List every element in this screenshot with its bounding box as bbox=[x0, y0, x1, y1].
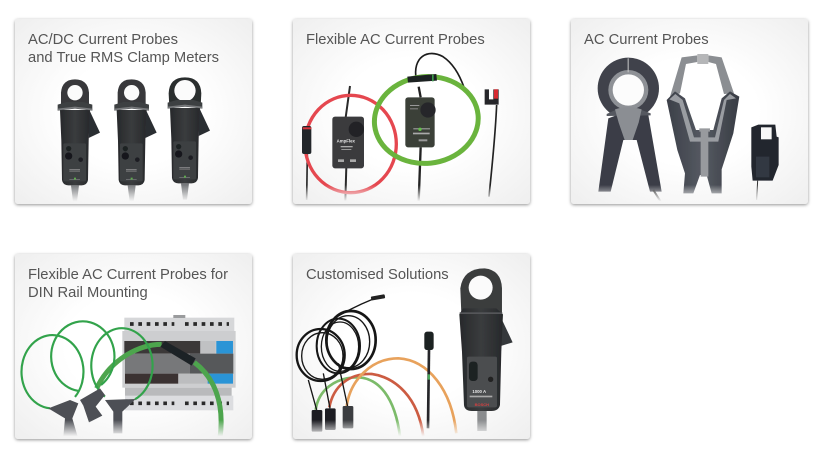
sub-element: small clamp bbox=[751, 125, 779, 200]
heading: AC/DC Current Probes: and True RMS Clamp Meters bbox=[28, 50, 219, 66]
sub-element: red probe integrator box bbox=[332, 117, 364, 168]
sub-element: voltage lead bbox=[424, 332, 434, 428]
heading: Flexible AC Current Probes: Flexible AC Current Probes bbox=[306, 32, 485, 48]
sub-element: green probe integrator box bbox=[405, 97, 436, 147]
heading: AC Current Probes: AC Current Probes bbox=[584, 32, 709, 48]
icon: three AC clamps bbox=[598, 54, 779, 202]
sub-element: red probe integrator box: AmpFlex bbox=[337, 139, 356, 144]
sub-element: large clamp probe: 1000 A bbox=[472, 389, 487, 394]
heading: Flexible AC Current Probes for DIN Rail Mounting: DIN Rail Mounting bbox=[28, 285, 148, 301]
sub-element: coloured flexible loops bbox=[316, 358, 456, 437]
card: Flexible AC Current Probes for DIN Rail Mounting bbox=[15, 254, 252, 439]
sub-element: black coiled cables bbox=[297, 299, 376, 410]
sub-element: connectors bbox=[312, 406, 353, 432]
card: AC/DC Current Probes and True RMS Clamp Meters bbox=[15, 19, 252, 204]
sub-element: round jaw clamp bbox=[598, 58, 662, 202]
icon: three clamp meters bbox=[58, 77, 210, 202]
sub-element: large clamp probe bbox=[459, 268, 513, 431]
sub-element: DIN rail module bbox=[122, 315, 236, 410]
sub-element: long jaw clamp bbox=[667, 54, 739, 193]
icon: custom coils and clamp probe bbox=[297, 268, 513, 437]
card: Flexible AC Current Probes bbox=[293, 19, 530, 204]
icon: DIN rail module with green probes bbox=[21, 315, 236, 438]
sub-element: probe heads bbox=[48, 388, 136, 437]
heading: Customised Solutions: Customised Solutions bbox=[306, 267, 449, 283]
heading: AC/DC Current Probes: AC/DC Current Probes bbox=[28, 32, 178, 48]
heading: Flexible AC Current Probes for DIN Rail Mounting: Flexible AC Current Probes for bbox=[28, 267, 228, 283]
card: Customised Solutions bbox=[293, 254, 530, 439]
sub-element: banana plug bbox=[485, 89, 499, 197]
icon: red and green flexible probes bbox=[302, 54, 499, 202]
card: AC Current Probes bbox=[571, 19, 808, 204]
sub-element: large clamp probe: BOSCH bbox=[475, 402, 489, 407]
